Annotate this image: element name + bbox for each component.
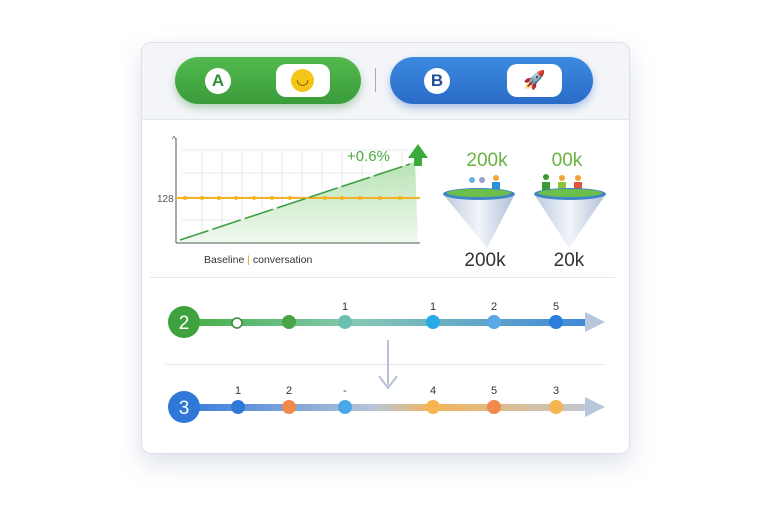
header band [142, 43, 629, 120]
icon: rocket: 🚀 [523, 70, 546, 90]
timeline 2: 5 [553, 301, 559, 313]
timeline 3: 1 [235, 385, 241, 397]
line chart: Baseline | conversation [204, 254, 313, 266]
timeline 2: 2 [491, 301, 497, 313]
funnel 1: 200k [464, 250, 506, 271]
divider [375, 68, 376, 92]
funnel 2 [534, 150, 606, 271]
funnel 2: 00k [552, 150, 583, 171]
funnel 1 [443, 150, 515, 271]
badge A [205, 68, 231, 94]
timeline 3: - [343, 385, 347, 397]
timeline 2: 2 [179, 313, 189, 334]
line chart: +0.6% [347, 148, 390, 165]
timeline 3: 4 [430, 385, 436, 397]
icon: rocket [507, 64, 562, 97]
timeline 3 [168, 385, 605, 423]
timeline 3: 3 [553, 385, 559, 397]
funnel 1: 200k [466, 150, 508, 171]
timeline 2: 1 [430, 301, 436, 313]
funnel 2: 20k [554, 250, 585, 271]
card [141, 42, 630, 454]
badge A: A [212, 71, 224, 90]
badge B: B [431, 71, 443, 90]
funnels [443, 150, 606, 271]
arrow down [378, 340, 398, 390]
line chart: ^ [172, 135, 176, 144]
pill B [390, 57, 593, 104]
timeline 2: 1 [342, 301, 348, 313]
icon: smiley: ◡ [296, 71, 309, 88]
timeline 3: 2 [286, 385, 292, 397]
badge B [424, 68, 450, 94]
divider [165, 364, 605, 365]
divider [150, 277, 615, 278]
timeline 3: 5 [491, 385, 497, 397]
icon: smiley [276, 64, 330, 97]
line chart [157, 135, 428, 266]
timeline 3: 3 [179, 398, 189, 419]
pill A [175, 57, 361, 104]
timeline 2 [168, 301, 605, 338]
line chart: 128 [157, 194, 174, 205]
